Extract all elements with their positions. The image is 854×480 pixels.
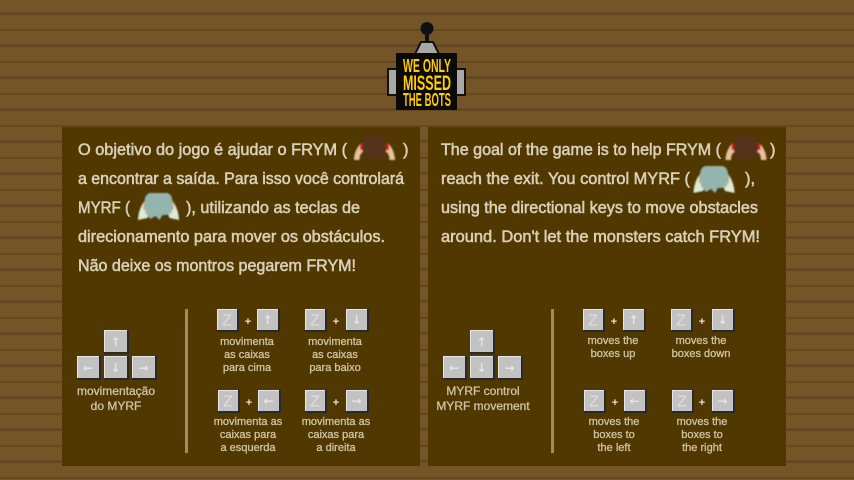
combo: Z + left: moves the: [589, 416, 639, 428]
combo: Z + down: +: [699, 316, 705, 328]
combo: Z + left: ←: [263, 394, 274, 408]
combo: Z + up: Z: [588, 312, 598, 330]
combo: Z + left: +: [612, 397, 618, 409]
combo: Z + up: Z: [222, 312, 232, 330]
label: movimentação do MYRF: do MYRF: [91, 399, 141, 413]
combo: Z + up: as caixas: [224, 349, 270, 361]
antenna: [420, 22, 434, 43]
logo text: WE ONLY: [403, 56, 451, 76]
intro text: ): [770, 141, 776, 159]
combo: Z + up: moves the: [588, 335, 638, 347]
combo: Z + right: [672, 390, 735, 454]
combo: Z + up: boxes up: [591, 348, 635, 360]
arrow keys block: [443, 330, 523, 380]
label: MYRF control: MYRF control: [446, 384, 520, 398]
combo: Z + right: a direita: [316, 442, 356, 454]
combo: Z + down: movimenta: [308, 336, 363, 348]
arrow keys block: [77, 330, 157, 380]
combo: Z + up: ↑: [262, 313, 273, 327]
combo: Z + down: +: [333, 316, 339, 328]
combo: Z + left: +: [246, 397, 252, 409]
icon: FRYM: [726, 136, 766, 162]
combo: Z + right: +: [699, 397, 705, 409]
combo: Z + left: ←: [629, 394, 640, 408]
key: left: ←: [449, 361, 459, 375]
combo: Z + down: [305, 309, 369, 374]
combo: Z + left: a esquerda: [220, 442, 276, 454]
combo: Z + left: caixas para: [220, 429, 277, 441]
combo: Z + down: Z: [310, 312, 320, 330]
combo: Z + right: boxes to: [681, 429, 723, 441]
combo: Z + left: Z: [223, 394, 233, 410]
logo text: THE BOTS: [403, 90, 451, 110]
combo: Z + up: para cima: [223, 362, 272, 374]
combo: Z + left: [214, 390, 283, 454]
intro text: reach the exit. You control MYRF (: [441, 170, 690, 188]
key: up: ↑: [476, 335, 487, 349]
combo: Z + right: the right: [682, 442, 722, 454]
label: MYRF control: [436, 384, 530, 413]
combo: Z + right: movimenta as: [302, 416, 371, 428]
combo: Z + left: Z: [589, 394, 599, 410]
logo: We Only Missed the Bots robot: [388, 22, 465, 110]
logo text: [403, 56, 451, 110]
combo: Z + down: as caixas: [312, 349, 358, 361]
combo: Z + up: ↑: [628, 313, 639, 327]
panel: English instructions: [428, 127, 786, 466]
intro text: [78, 141, 408, 275]
combo: Z + left: [584, 390, 647, 454]
combo: Z + down: boxes down: [672, 348, 730, 360]
combo: Z + down: [671, 309, 735, 360]
label: MYRF control: MYRF movement: [436, 399, 530, 413]
intro text: ),: [745, 170, 755, 188]
combo: Z + up: [583, 309, 646, 360]
key: up: ↑: [110, 335, 121, 349]
combo: Z + up: [217, 309, 280, 374]
label: movimentação do MYRF: [77, 384, 155, 413]
left ear: [388, 69, 397, 95]
combo: Z + up: +: [611, 316, 617, 328]
combo: Z + right: [302, 390, 371, 454]
combo: Z + up: +: [245, 316, 251, 328]
combo: Z + right: →: [351, 394, 362, 408]
icon: FRYM: [354, 136, 395, 162]
intro text: O objetivo do jogo é ajudar o FRYM (: [78, 141, 347, 159]
label: movimentação do MYRF: movimentação: [77, 384, 155, 398]
panel: Portuguese instructions: [62, 127, 420, 466]
combo: Z + right: Z: [310, 394, 320, 410]
combo: Z + left: movimenta as: [214, 416, 283, 428]
key: right: →: [504, 361, 515, 375]
combo: Z + down: moves the: [676, 335, 726, 347]
combo: Z + left: the left: [597, 442, 631, 454]
logo sign: [396, 53, 457, 110]
combo: Z + right: →: [717, 394, 728, 408]
combo: Z + right: +: [333, 397, 339, 409]
key: down: ↓: [476, 361, 487, 375]
combo: Z + down: ↓: [717, 313, 728, 327]
logo text: MISSED: [403, 72, 451, 95]
icon: MYRF: [138, 193, 179, 220]
intro text: Não deixe os montros pegarem FRYM!: [78, 257, 356, 275]
key: down: ↓: [110, 361, 121, 375]
intro text: a encontrar a saída. Para isso você controlará: [78, 170, 405, 188]
intro text: using the directional keys to move obstacles: [441, 199, 758, 217]
intro text: ), utilizando as teclas de: [186, 199, 360, 217]
combo: Z + right: Z: [677, 394, 687, 410]
intro text: direcionamento para mover os obstáculos.: [78, 228, 385, 246]
combo: Z + up: movimenta: [220, 336, 275, 348]
intro text: around. Don't let the monsters catch FRYM!: [441, 228, 760, 246]
intro text: ): [403, 141, 408, 159]
combo: Z + down: para baixo: [309, 362, 361, 374]
icon: MYRF: [694, 166, 734, 193]
intro text: [441, 141, 776, 246]
combo: Z + left: boxes to: [593, 429, 635, 441]
intro text: MYRF (: [78, 199, 130, 217]
combo: Z + down: ↓: [351, 313, 362, 327]
combo: Z + right: caixas para: [308, 429, 365, 441]
right ear: [456, 69, 465, 95]
robot head top: [415, 42, 439, 54]
intro text: The goal of the game is to help FRYM (: [441, 141, 721, 159]
key: right: →: [138, 361, 149, 375]
combo: Z + right: moves the: [677, 416, 727, 428]
key: left: ←: [83, 361, 93, 375]
combo: Z + down: Z: [676, 312, 686, 330]
